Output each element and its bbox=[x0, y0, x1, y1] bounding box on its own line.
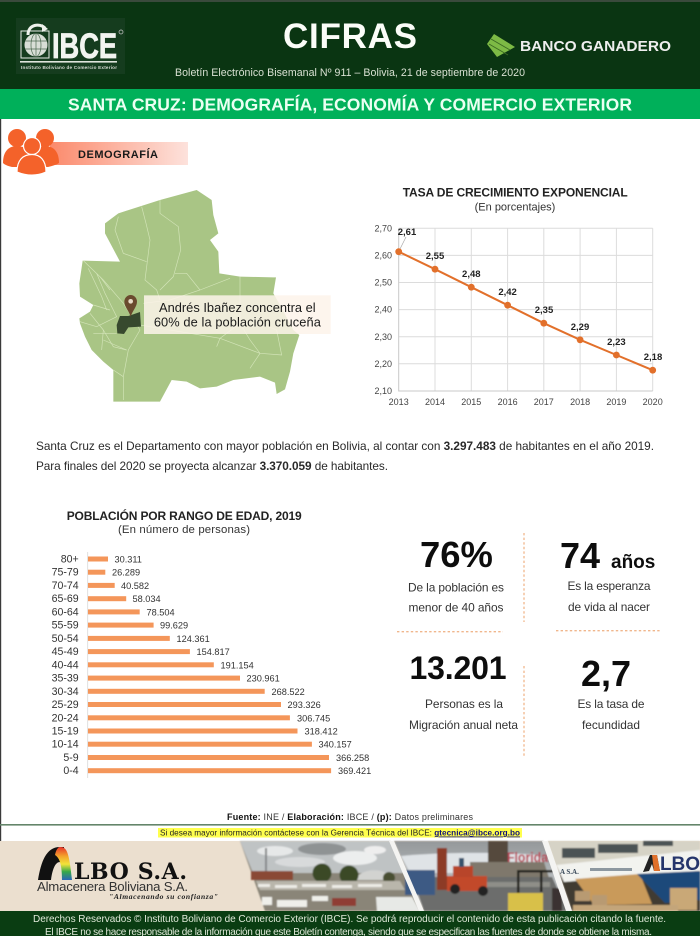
stat: 74 años: Es la esperanza bbox=[568, 579, 651, 593]
chart: población por rango de edad: 230.961 bbox=[246, 674, 280, 684]
chart: población por rango de edad: 45-49 bbox=[52, 646, 79, 658]
stat: 2,7: 2,7 bbox=[581, 653, 631, 694]
chart: tasa de crecimiento: 2,70 bbox=[374, 224, 392, 234]
chart: población por rango de edad: 25-29 bbox=[52, 699, 79, 711]
photo: forklift and plane: Florida bbox=[507, 849, 548, 865]
stat: 76%: menor de 40 años bbox=[408, 600, 504, 614]
chart: población por rango de edad: 58.034 bbox=[132, 594, 161, 604]
chart: población por rango de edad: 70-74 bbox=[52, 580, 79, 592]
source note: Fuente: INE / Elaboración: IBCE / (p): Datos preliminares bbox=[227, 812, 474, 822]
footer bbox=[0, 911, 700, 936]
chart: población por rango de edad: 268.522 bbox=[272, 687, 305, 697]
logo: ALBO: "Almacenando su confianza" bbox=[109, 892, 218, 901]
chart: población por rango de edad: 65-69 bbox=[52, 593, 79, 605]
logo: Banco Ganadero: BANCO GANADERO bbox=[520, 38, 671, 55]
chart subtitle: (En número de personas) bbox=[118, 524, 250, 536]
section banner: demografía bbox=[3, 129, 188, 175]
page frame bbox=[0, 0, 1, 936]
warehouse sign: LBO bbox=[660, 854, 700, 875]
stat: 76% bbox=[408, 534, 504, 614]
warehouse sign bbox=[560, 854, 700, 876]
stat: 74 años: de vida al nacer bbox=[568, 600, 650, 614]
chart: tasa de crecimiento: 2,42 bbox=[498, 287, 517, 298]
chart: población por rango de edad: 369.421 bbox=[338, 766, 371, 776]
chart: población por rango de edad: 40-44 bbox=[52, 659, 79, 671]
chart: población por rango de edad: 30.311 bbox=[114, 554, 142, 564]
chart title: POBLACIÓN POR RANGO DE EDAD, 2019 bbox=[67, 508, 302, 523]
chart: tasa de crecimiento: 2,35 bbox=[535, 305, 554, 316]
warehouse sign: A S.A. bbox=[560, 868, 579, 876]
icon: people bbox=[3, 129, 59, 175]
chart: población por rango de edad: 78.504 bbox=[146, 607, 175, 617]
chart: tasa de crecimiento: 2017 bbox=[534, 397, 554, 407]
contact note: Si desea mayor información contáctese con la Gerencia Técnica del IBCE: gtecnica@ibce.org.bo bbox=[160, 828, 520, 838]
stat: 74 años: 74 bbox=[560, 535, 600, 576]
chart: tasa de crecimiento: 2,50 bbox=[374, 278, 392, 288]
chart: tasa de crecimiento: 2013 bbox=[389, 397, 409, 407]
photo dividers bbox=[389, 841, 572, 911]
chart: tasa de crecimiento: 2,61 bbox=[398, 227, 417, 238]
footer: Derechos Reservados © Instituto Boliviano de Comercio Exterior (IBCE). Se podrá reproducir el contenido de esta publicación citando la fuente. bbox=[33, 914, 666, 925]
chart: población por rango de edad: 191.154 bbox=[220, 660, 254, 670]
stat: 74 años: años bbox=[611, 552, 655, 573]
chart: población por rango de edad: 99.629 bbox=[160, 621, 188, 631]
chart: población por rango de edad: 26.289 bbox=[112, 568, 140, 578]
chart: población por rango de edad: 340.157 bbox=[318, 740, 352, 750]
logo: ALBO bbox=[37, 847, 218, 901]
callout bbox=[144, 295, 331, 334]
chart: tasa de crecimiento: 2018 bbox=[570, 397, 590, 407]
text block: población: Para finales del 2020 se proyecta alcanzar 3.370.059 de habitantes. bbox=[36, 459, 388, 473]
subtitle: Boletín Electrónico Bisemanal Nº 911 – Bolivia, 21 de septiembre de 2020 bbox=[175, 67, 525, 79]
chart: tasa de crecimiento: 2,30 bbox=[374, 332, 392, 342]
title bar bbox=[0, 89, 700, 119]
chart: población por rango de edad: 35-39 bbox=[52, 673, 79, 685]
chart: población por rango de edad: 60-64 bbox=[52, 606, 79, 618]
stat: 74 años bbox=[560, 535, 655, 614]
icon: map pin bbox=[124, 295, 137, 317]
chart: población por rango de edad: 154.817 bbox=[196, 647, 230, 657]
text block: población bbox=[36, 439, 654, 473]
logo: IBCE: Instituto Boliviano de Comercio Exterior bbox=[21, 65, 117, 70]
stat: 2,7: Es la tasa de bbox=[578, 697, 645, 711]
panel: key figures bbox=[397, 533, 661, 757]
chart: tasa de crecimiento: 2,60 bbox=[374, 250, 392, 260]
highlighted province bbox=[117, 312, 141, 334]
photo strip bbox=[240, 841, 700, 911]
chart: población por rango de edad: 50-54 bbox=[52, 633, 79, 645]
chart: tasa de crecimiento: 2019 bbox=[606, 397, 626, 407]
photo: truck yard bbox=[240, 841, 420, 911]
chart: tasa de crecimiento: 2,10 bbox=[374, 386, 392, 396]
chart: población por rango de edad: 124.361 bbox=[176, 634, 210, 644]
chart: tasa de crecimiento: 2,18 bbox=[644, 352, 662, 363]
chart: tasa de crecimiento: 2014 bbox=[425, 397, 445, 407]
chart: tasa de crecimiento: 2015 bbox=[461, 397, 481, 407]
chart: tasa de crecimiento: 2,29 bbox=[571, 322, 589, 333]
stat: 2,7: fecundidad bbox=[582, 718, 640, 732]
chart: tasa de crecimiento: 2016 bbox=[498, 397, 518, 407]
chart: población por rango de edad: 80+ bbox=[61, 554, 79, 566]
chart: población por rango de edad: 366.258 bbox=[336, 753, 369, 763]
chart: población por rango de edad: 10-14 bbox=[52, 739, 79, 751]
text block: población: Santa Cruz es el Departamento con mayor población en Bolivia, al contar con 3.297.483 de habitantes en el año 2019. bbox=[36, 439, 654, 453]
chart: población por rango de edad: 15-19 bbox=[52, 726, 79, 738]
stat: 13.201: Personas es la bbox=[425, 697, 503, 711]
chart: tasa de crecimiento: 2,40 bbox=[374, 304, 392, 314]
title bar: SANTA CRUZ: DEMOGRAFÍA, ECONOMÍA Y COMERCIO EXTERIOR bbox=[68, 94, 632, 114]
chart: población por rango de edad: 5-9 bbox=[63, 752, 79, 764]
chart: población por rango de edad: 55-59 bbox=[52, 620, 79, 632]
chart: población por rango de edad bbox=[52, 508, 371, 778]
section banner: demografía: DEMOGRAFÍA bbox=[78, 148, 158, 161]
stat: 76%: De la población es bbox=[408, 580, 504, 594]
logo: Banco Ganadero bbox=[487, 34, 671, 57]
callout: Andrés Ibañez concentra el bbox=[159, 300, 316, 315]
header band bbox=[0, 0, 700, 89]
chart: tasa de crecimiento: 2,23 bbox=[607, 337, 626, 348]
chart subtitle: (En porcentajes) bbox=[475, 202, 555, 214]
logo: ALBO: Almacenera Boliviana S.A. bbox=[37, 879, 188, 894]
chart: población por rango de edad: 293.326 bbox=[288, 700, 321, 710]
chart: población por rango de edad: 75-79 bbox=[52, 567, 79, 579]
logo: IBCE bbox=[16, 18, 125, 74]
chart: población por rango de edad: 318.412 bbox=[304, 726, 338, 736]
chart: población por rango de edad: 30-34 bbox=[52, 686, 79, 698]
stat: 2,7 bbox=[578, 653, 645, 732]
logo: IBCE: IBCE bbox=[52, 27, 117, 66]
chart: población por rango de edad: 20-24 bbox=[52, 712, 79, 724]
stat: 76%: 76% bbox=[420, 534, 493, 575]
chart: población por rango de edad: 40.582 bbox=[121, 581, 149, 591]
banner: ALBO S.A. bbox=[0, 841, 700, 911]
map: Santa Cruz bbox=[79, 190, 331, 402]
chart title: TASA DE CRECIMIENTO EXPONENCIAL bbox=[403, 186, 628, 200]
chart: tasa de crecimiento bbox=[374, 186, 663, 407]
chart: población por rango de edad: 0-4 bbox=[63, 765, 79, 777]
chart: tasa de crecimiento: 2,48 bbox=[462, 269, 481, 280]
chart: población por rango de edad: 306.745 bbox=[297, 713, 330, 723]
photo: forklift and plane bbox=[394, 841, 568, 911]
stat: 13.201: Migración anual neta bbox=[409, 718, 518, 732]
photo: warehouse bbox=[548, 841, 700, 911]
chart: tasa de crecimiento: 2020 bbox=[643, 397, 663, 407]
stat: 13.201 bbox=[409, 650, 518, 732]
callout: 60% de la población cruceña bbox=[154, 315, 322, 330]
chart: tasa de crecimiento: 2,55 bbox=[426, 251, 445, 262]
title: CIFRAS bbox=[283, 17, 417, 56]
stat: 13.201: 13.201 bbox=[410, 650, 506, 686]
logo: ALBO: LBO S.A. bbox=[74, 859, 187, 885]
chart: tasa de crecimiento: 2,20 bbox=[374, 359, 392, 369]
